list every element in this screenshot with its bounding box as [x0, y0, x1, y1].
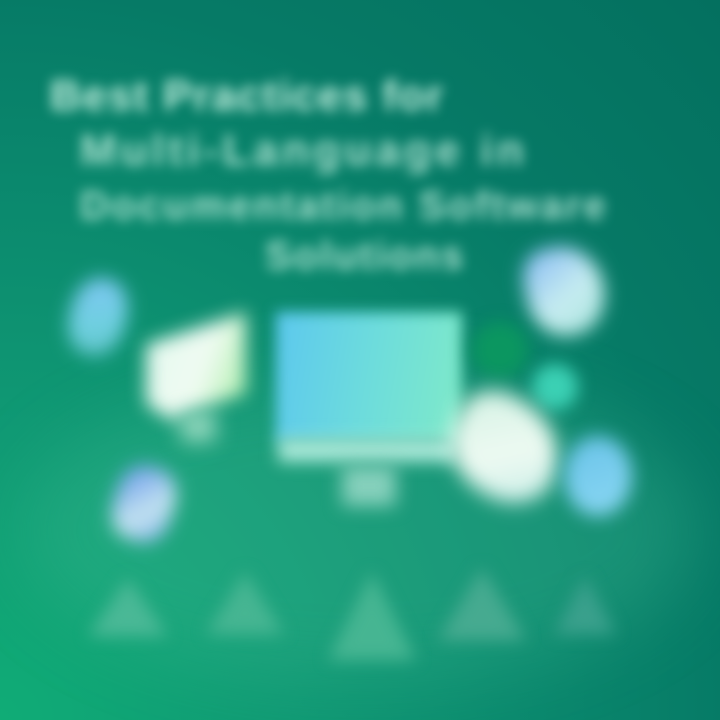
small base under card — [180, 412, 216, 442]
icon: blue droplet left — [61, 272, 135, 362]
icon: pale blue shape top right — [517, 239, 613, 343]
title — [43, 71, 612, 278]
white cloud — [431, 377, 579, 519]
title: Best Practices for — [50, 72, 444, 120]
title: Solutions — [265, 234, 465, 278]
monitor screen — [276, 312, 462, 442]
monitor bottom bezel — [278, 438, 458, 462]
row of five pale triangular icons — [88, 568, 617, 667]
monitor stand — [342, 466, 396, 506]
blue circle right — [564, 436, 632, 516]
triangle icon 3 — [326, 574, 418, 667]
triangle icon 5 — [555, 580, 617, 640]
triangle icon 1 — [88, 578, 168, 644]
dark green dot — [472, 322, 528, 378]
illustration — [56, 234, 644, 554]
teal dot — [532, 364, 578, 410]
triangle icon 4 — [438, 568, 527, 647]
soft glow behind illustration — [20, 380, 700, 680]
icon: blue gem lower left — [104, 459, 184, 549]
title: Multi-Language in — [80, 126, 528, 175]
triangle icon 2 — [206, 574, 284, 640]
title: Documentation Software — [80, 184, 608, 228]
document card left — [131, 301, 260, 432]
